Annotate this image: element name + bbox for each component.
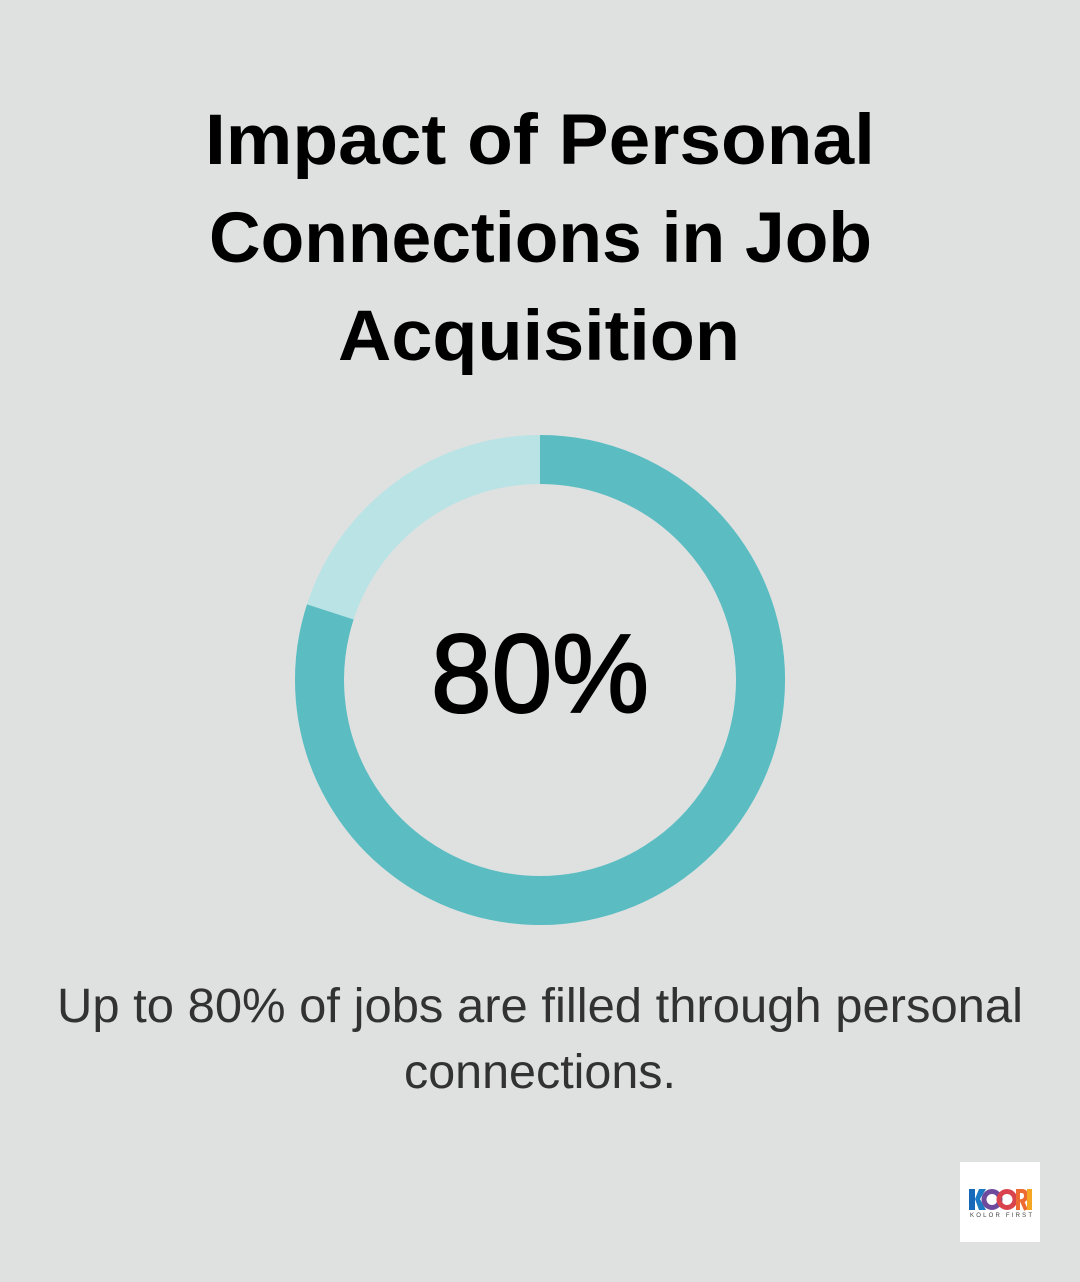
description text: connections. [404, 1046, 676, 1099]
donut chart: 80% [320, 460, 761, 901]
title [205, 101, 875, 376]
logo: Koori Kolor First [960, 1162, 1040, 1242]
title: Acquisition [338, 297, 740, 376]
donut segment: 80% [320, 460, 761, 901]
description text [57, 980, 1023, 1099]
logo: Koori Kolor First: KOLOR FIRST [970, 1213, 1032, 1219]
description text: Up to 80% of jobs are filled through personal [57, 980, 1023, 1033]
title: Connections in Job [209, 199, 872, 278]
title: Impact of Personal [205, 101, 875, 180]
donut value: 80% [431, 612, 649, 736]
donut track: remaining 20% [320, 460, 760, 900]
